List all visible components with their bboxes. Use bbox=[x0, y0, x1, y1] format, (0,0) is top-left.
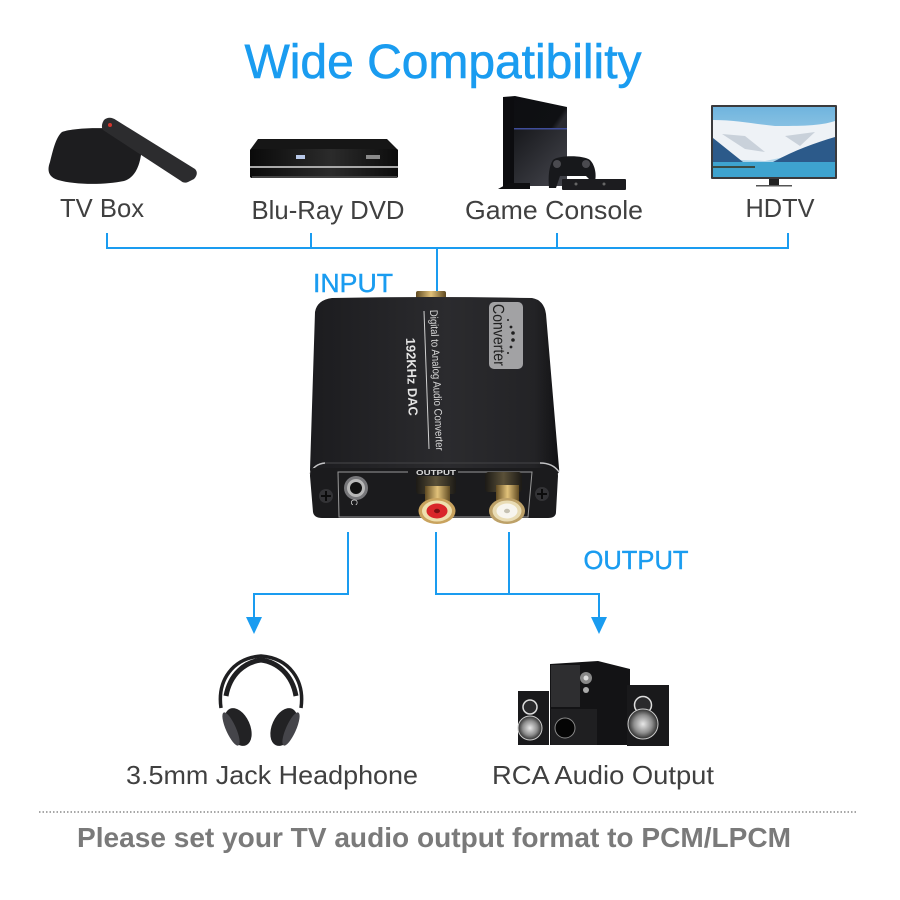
label: headphone: 3.5mm Jack Headphone bbox=[126, 760, 418, 790]
label: RCA audio output: RCA Audio Output bbox=[492, 760, 715, 790]
dotted divider bbox=[39, 811, 857, 813]
3.5mm jack: C bbox=[349, 499, 359, 506]
red RCA socket bbox=[416, 476, 456, 524]
3.5mm jack bbox=[344, 476, 368, 506]
device OUTPUT marking: OUTPUT bbox=[416, 470, 457, 477]
label: INPUT: INPUT bbox=[313, 268, 393, 298]
output connector lines bbox=[254, 532, 599, 618]
icon: speaker system bbox=[518, 661, 669, 746]
label: TV Box: TV Box bbox=[60, 193, 144, 223]
device top body bbox=[310, 297, 559, 474]
white RCA socket bbox=[485, 472, 525, 524]
right screw bbox=[535, 487, 549, 501]
arrow: to headphone bbox=[246, 617, 262, 634]
icon: TV box with remote bbox=[49, 118, 197, 184]
title: Wide Compatibility bbox=[244, 36, 642, 89]
label: OUTPUT: OUTPUT bbox=[584, 545, 689, 575]
device: digital to analog converter: 192KHz DAC bbox=[403, 338, 421, 417]
input connector lines bbox=[107, 233, 788, 292]
icon: game console with controller bbox=[498, 96, 626, 190]
label: Game Console: Game Console bbox=[465, 195, 643, 225]
label: HDTV: HDTV bbox=[746, 193, 815, 223]
arrow: to speakers bbox=[591, 617, 607, 634]
device silver edge bbox=[325, 462, 540, 464]
device: digital to analog converter bbox=[310, 291, 559, 524]
printed lines: Digital to Analog Audio Converter bbox=[427, 310, 445, 451]
label: Blu-Ray DVD: Blu-Ray DVD bbox=[252, 195, 404, 225]
icon: Blu-Ray DVD player bbox=[250, 139, 398, 178]
label plate bbox=[489, 302, 523, 369]
footer note: Please set your TV audio output format to PCM/LPCM bbox=[77, 822, 791, 853]
icon: headphones bbox=[219, 656, 303, 750]
icon: HDTV bbox=[711, 105, 837, 186]
input coaxial connector bbox=[416, 291, 446, 299]
label plate: Converter bbox=[489, 304, 507, 367]
left screw bbox=[319, 489, 333, 503]
device front face bbox=[310, 468, 558, 518]
